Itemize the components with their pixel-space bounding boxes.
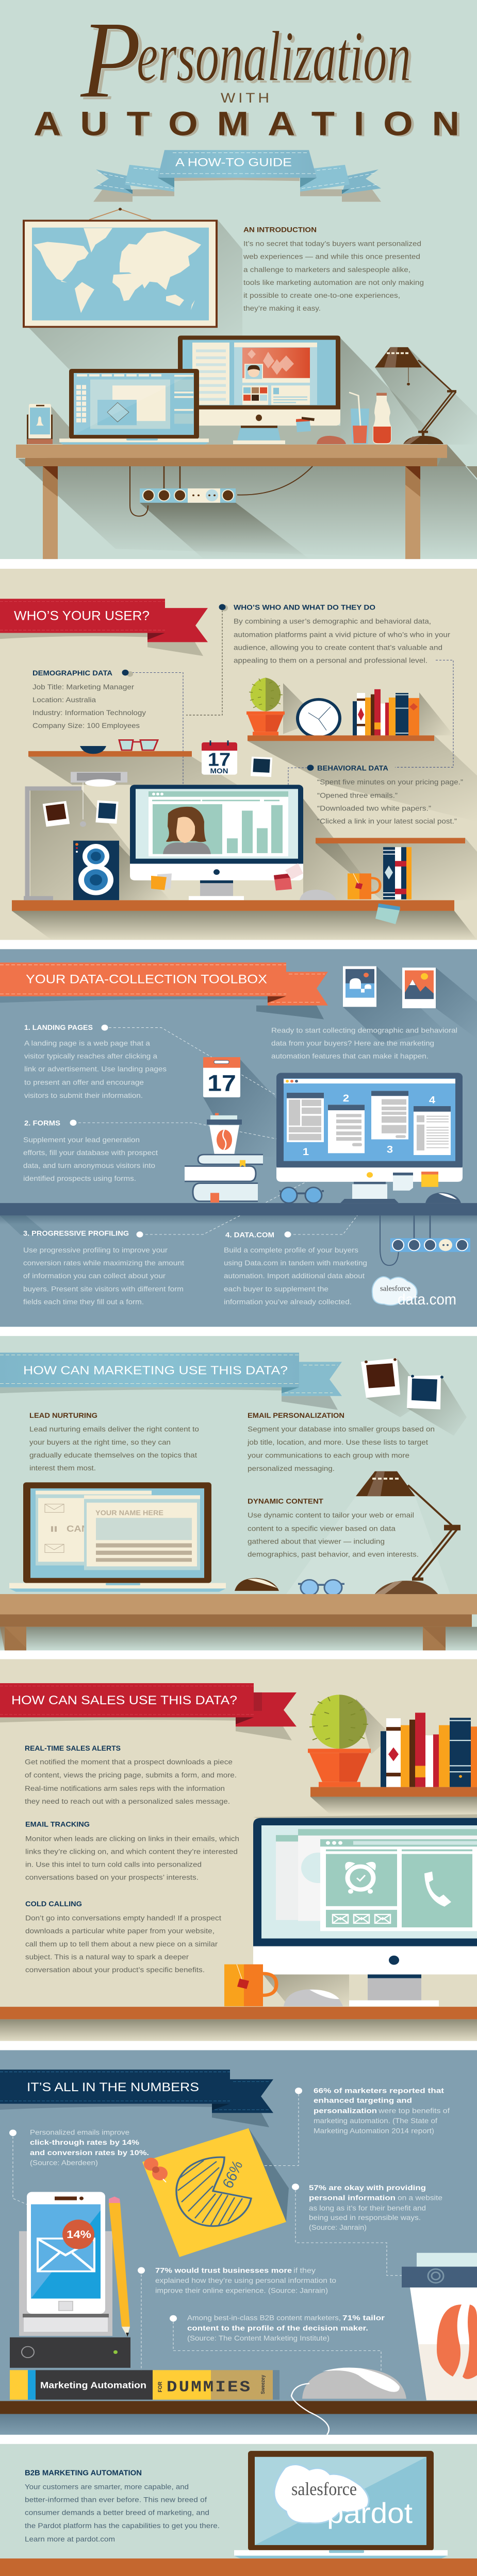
text: b2b marketing automation: better-informed than ever before. This new breed of xyxy=(25,2496,207,2504)
glass of juice xyxy=(349,393,369,444)
text: who's who: By combining a user’s demographic and behavioral data, xyxy=(234,618,431,625)
panel: sales use xyxy=(0,1659,477,2041)
laptop with email builder xyxy=(9,1482,226,1592)
intro text: a challenge to marketers and salespeople alike, xyxy=(243,266,410,274)
title: WITH xyxy=(221,90,269,106)
text: who's who: automation platforms paint a vivid picture of who’s who in your xyxy=(234,631,450,639)
text: real-time sales alerts: Real-time notifications arm sales reps with the information xyxy=(25,1785,225,1793)
laptop with pardot logo xyxy=(234,2451,448,2558)
text: who's who: WHO’S WHO AND WHAT DO THEY DO xyxy=(234,604,375,612)
stat: 66% of marketers: 66% of marketers reported that xyxy=(314,2087,444,2095)
dashed connectors xyxy=(128,611,453,813)
dashed connectors xyxy=(13,2094,427,2378)
ribbon: numbers xyxy=(0,2070,273,2113)
intro text: web experiences — and while this once presented xyxy=(243,253,420,261)
title: AUTOMATION xyxy=(36,105,462,143)
pie chart sketch xyxy=(176,2157,251,2226)
text: cold calling: call them up to tell them about a new piece on a similar xyxy=(25,1940,218,1948)
polaroid: night scene xyxy=(343,966,376,1007)
stat: 57% okay: as long as it’s for their benefit and xyxy=(309,2205,426,2212)
text: who's who xyxy=(219,604,450,665)
intro text: It’s no secret that today’s buyers want personalized xyxy=(243,240,421,248)
text: real-time sales alerts xyxy=(25,1745,237,1806)
callout: 14% xyxy=(62,2219,94,2249)
text: landing pages: to present an offer and encourage xyxy=(24,1079,144,1087)
text: landing pages: link or advertisement. Use landing pages xyxy=(24,1065,167,1074)
computer mouse with cable xyxy=(0,2367,477,2435)
icon: telephone xyxy=(424,1872,451,1907)
window numbers: 1 xyxy=(303,1146,309,1158)
shelf and desk long shadows xyxy=(12,683,477,940)
text: behavioral data: “Downloaded two white papers.” xyxy=(317,805,431,812)
text: real-time sales alerts: Get notified the moment that a prospect downloads a piece xyxy=(25,1758,233,1767)
text: email tracking: in. Use this intel to turn cold calls into personalized xyxy=(25,1861,202,1869)
wood shelves xyxy=(28,735,465,843)
phone on dock xyxy=(27,404,53,444)
text: data.com: using Data.com in tandem with marketing xyxy=(224,1260,367,1267)
text: landing pages xyxy=(24,1024,167,1100)
phone with email icon xyxy=(19,2192,112,2336)
text: demographic data: Company Size: 100 Employees xyxy=(32,722,140,730)
text: who's who: audience, allowing you to create content that’s valuable and xyxy=(234,644,442,652)
navy desk xyxy=(0,1203,477,1215)
intro text: tools like marketing automation are not only making xyxy=(243,279,424,287)
marketing automation for dummies book: Marketing Automation xyxy=(40,2380,146,2391)
bowl and red glasses xyxy=(80,740,158,754)
big monitor xyxy=(253,1818,477,2006)
icon: push pin xyxy=(144,2158,168,2182)
orange desk xyxy=(0,2007,477,2019)
text: forms xyxy=(23,1120,158,1183)
long shadows xyxy=(0,1699,477,2041)
intro text xyxy=(243,226,424,313)
orange mug xyxy=(224,1964,276,2006)
marketing automation for dummies book: DUMMIES xyxy=(167,2378,250,2396)
power strip and cables xyxy=(130,466,312,516)
orange desk xyxy=(12,900,454,911)
floor lamp xyxy=(24,772,127,900)
pencil xyxy=(109,2196,130,2337)
ribbon: sales xyxy=(0,1683,297,1726)
stat: 57% okay: 57% are okay with providing xyxy=(309,2184,426,2192)
coffee cup on books xyxy=(185,1113,263,1202)
lower books xyxy=(383,847,412,900)
text: dynamic content: gathered about that viewer — including xyxy=(248,1538,385,1546)
wooden desk xyxy=(16,445,447,559)
wall clock xyxy=(296,698,341,739)
window numbers: 4 xyxy=(429,1095,436,1106)
books xyxy=(381,1713,477,1787)
stat: 71% tailor: Among best-in-class B2B content marketers, xyxy=(187,2314,341,2322)
text: ready to start xyxy=(271,1027,457,1060)
stat: 57% okay: on a website xyxy=(398,2194,442,2202)
desk lamp xyxy=(375,347,456,444)
ribbon: who's your user xyxy=(0,599,208,656)
window numbers xyxy=(303,1093,436,1158)
panel: who's your user xyxy=(0,569,477,940)
text: b2b marketing automation: the Pardot platform has the capabilities to get you there. xyxy=(25,2522,220,2530)
stat: 77% trust: improve their online experience. (Source: Janrain) xyxy=(155,2287,328,2295)
text: email tracking xyxy=(25,1821,239,1882)
calendar: 17 mon: MON xyxy=(210,768,228,775)
panel: data-collection toolbox xyxy=(0,949,477,1327)
ribbon: a how-to guide: A HOW-TO GUIDE xyxy=(175,157,292,169)
bottle xyxy=(373,393,391,444)
laptop with pardot logo: salesforce xyxy=(291,2479,357,2500)
title: P xyxy=(83,1,144,124)
text: cold calling: Don’t go into conversations empty handed! If a prospect xyxy=(25,1914,221,1922)
panel: numbers xyxy=(0,2050,477,2435)
callout: 14%: 14% xyxy=(67,2228,91,2241)
calendar: 17 mon: 17 xyxy=(208,750,231,770)
framed world map xyxy=(23,208,218,328)
stat: 77% trust: if they xyxy=(293,2267,316,2275)
text: real-time sales alerts: of content, views the pricing page, submits a form, and more. xyxy=(25,1771,237,1780)
stat: click-through rates: Personalized emails improve xyxy=(30,2129,129,2137)
laptop with email builder: YOUR NAME HERE xyxy=(95,1510,163,1517)
note under desk xyxy=(375,904,400,924)
stat: click-through rates: and conversion rates by 10%. xyxy=(30,2149,149,2157)
ribbon: toolbox: YOUR DATA-COLLECTION TOOLBOX xyxy=(26,973,267,986)
form window 1 xyxy=(287,1093,324,1142)
coffee cup xyxy=(402,2253,477,2400)
panel: title and intro xyxy=(0,0,477,559)
pinned polaroids xyxy=(361,1358,443,1410)
notes and glasses xyxy=(279,1172,461,1203)
mouse xyxy=(235,1578,279,1591)
text: b2b marketing automation xyxy=(25,2469,220,2544)
long shadows xyxy=(0,1358,477,1650)
wall polaroids xyxy=(43,800,119,827)
form window 4 xyxy=(414,1106,451,1155)
text: progressive profiling xyxy=(23,1230,184,1306)
dark device xyxy=(10,2337,130,2368)
panel: marketing use xyxy=(0,1336,477,1650)
marketing automation for dummies book xyxy=(10,2370,279,2400)
text: email personalization: personalized messaging. xyxy=(248,1465,335,1473)
eyeglasses xyxy=(298,1580,344,1596)
books on shelf xyxy=(353,689,419,735)
text: ready to start: Ready to start collecting demographic and behavioral xyxy=(271,1027,457,1035)
stat: click-through rates: (Source: Aberdeen) xyxy=(30,2159,98,2167)
panel: pardot xyxy=(0,2444,477,2558)
text: data.com: each buyer to supplement the xyxy=(224,1285,328,1293)
window numbers: 2 xyxy=(343,1093,349,1104)
stat: click-through rates: click-through rates by 14% xyxy=(30,2139,139,2147)
monitor with user profile xyxy=(130,785,303,900)
laptop with email builder: CAN xyxy=(67,1524,89,1534)
text: ready to start: automation features that can make it happen. xyxy=(271,1053,429,1060)
sticky note with pie chart: 66% xyxy=(219,2159,246,2191)
laptop xyxy=(59,369,209,445)
text: lead nurturing: your buyers at the right time, so they can xyxy=(29,1438,171,1447)
cactus xyxy=(308,1694,371,1787)
long shadows xyxy=(0,966,477,1235)
speaker xyxy=(73,841,119,900)
marketing automation for dummies book: FOR xyxy=(158,2381,163,2392)
mouse xyxy=(284,1989,343,2006)
text: dynamic content xyxy=(248,1498,419,1558)
text: progressive profiling: 3. PROGRESSIVE PROFILING xyxy=(23,1230,129,1238)
title: P xyxy=(79,0,141,121)
text: email tracking: conversations based on your prospects’ interests. xyxy=(25,1874,199,1882)
text: lead nurturing: gradually educate themselves on the topics that xyxy=(29,1452,197,1460)
text: b2b marketing automation: B2B MARKETING AUTOMATION xyxy=(25,2469,142,2477)
text: data.com: Build a complete profile of your buyers xyxy=(224,1247,358,1255)
text: forms: 2. FORMS xyxy=(24,1120,60,1127)
text: cold calling: downloads a particular white paper from your website, xyxy=(25,1927,215,1935)
text: data.com: 4. DATA.COM xyxy=(225,1231,274,1239)
text: dynamic content: demographics, past behavior, and even interests. xyxy=(248,1551,419,1558)
polaroid: mountain xyxy=(402,968,436,1008)
text: landing pages: visitors to submit their information. xyxy=(24,1092,143,1100)
shelf xyxy=(310,1787,477,1797)
icon: envelope xyxy=(38,2239,94,2272)
text: demographic data: Industry: Information Technology xyxy=(32,709,146,717)
icons: envelopes xyxy=(333,1914,390,1923)
title: AUTOMATION xyxy=(34,104,459,143)
window numbers: 3 xyxy=(387,1144,393,1155)
stat: 66% of marketers: personalization xyxy=(314,2107,377,2115)
stat: 66% of marketers: Marketing Automation 2014 report) xyxy=(314,2127,434,2135)
text: dynamic content: Use dynamic content to tailor your web or email xyxy=(248,1512,414,1519)
text: forms: identified prospects using forms. xyxy=(23,1175,136,1183)
bottom orange desk xyxy=(0,2558,477,2576)
mouse xyxy=(300,890,336,900)
text: progressive profiling: fields each time they fill out a form. xyxy=(23,1298,144,1306)
text: behavioral data: “Spent five minutes on your pricing page.” xyxy=(317,778,463,786)
intro text: it possible to create one-to-one experiences, xyxy=(243,292,400,300)
sticky notes on monitor xyxy=(296,417,315,432)
text: progressive profiling: conversion rates while maximizing the amount xyxy=(23,1260,184,1267)
logo: salesforce data.com: salesforce xyxy=(380,1284,410,1293)
large desk lamp xyxy=(356,1471,460,1595)
sticky notes on monitor xyxy=(151,863,303,890)
text: landing pages: visitor typically reaches after clicking a xyxy=(24,1053,157,1060)
logo: salesforce data.com: data.com xyxy=(398,1291,456,1308)
text: progressive profiling: buyers. Present site visitors with different form xyxy=(23,1285,184,1293)
monitor with profile page xyxy=(178,335,340,444)
text: cold calling: subject. This is a natural way to spark a deeper xyxy=(25,1954,189,1961)
text: real-time sales alerts: REAL-TIME SALES ALERTS xyxy=(25,1745,121,1753)
text: behavioral data: BEHAVIORAL DATA xyxy=(317,765,388,772)
icon: alarm clock xyxy=(346,1863,375,1894)
ribbon: numbers: IT’S ALL IN THE NUMBERS xyxy=(27,2080,199,2094)
stat: 77% trust: explained how they’re using personal information to xyxy=(155,2277,336,2285)
text: email personalization: EMAIL PERSONALIZATION xyxy=(248,1412,344,1420)
ribbon: marketing xyxy=(0,1352,342,1396)
calendar: 17 mon xyxy=(202,740,237,775)
text: forms: data, and turn anonymous visitors into xyxy=(23,1162,155,1170)
text: b2b marketing automation: Your customers are smarter, more capable, and xyxy=(25,2483,189,2491)
intro text: they’re making it easy. xyxy=(243,305,321,313)
title xyxy=(34,0,462,143)
marketing automation for dummies book: Sweezey xyxy=(260,2375,266,2394)
text: lead nurturing: interest them most. xyxy=(29,1465,96,1472)
text: behavioral data xyxy=(307,765,463,825)
text: data.com: information you’ve already collected. xyxy=(224,1298,352,1306)
text: lead nurturing xyxy=(29,1412,199,1472)
text: behavioral data: “Clicked a link in your latest social post.” xyxy=(317,818,457,825)
text: data.com: automation. Import additional data about xyxy=(224,1273,365,1280)
text: cold calling: conversation about your product’s specific benefits. xyxy=(25,1967,205,1974)
power strip xyxy=(380,1215,470,1265)
intro text: AN INTRODUCTION xyxy=(243,226,317,234)
stat: 71% tailor: (Source: The Content Marketing Institute) xyxy=(187,2335,330,2343)
logo: salesforce data.com xyxy=(372,1277,456,1308)
text: lead nurturing: LEAD NURTURING xyxy=(29,1412,97,1420)
polaroid by calendar xyxy=(251,757,272,777)
stat: click-through rates xyxy=(9,2129,149,2167)
stat: 71% tailor: 71% tailor xyxy=(342,2314,385,2322)
stat: 57% okay: being used in responsible ways. xyxy=(309,2214,421,2222)
text: landing pages: A landing page is a web page that a xyxy=(24,1040,150,1047)
text: who's who: appealing to them on a personal and professional level. xyxy=(234,657,427,665)
text: email personalization: Segment your database into smaller groups based on xyxy=(248,1426,435,1433)
stat: 57% okay xyxy=(292,2183,442,2232)
stat: 77% trust: 77% would trust businesses more xyxy=(155,2267,292,2275)
text: b2b marketing automation: consumer demands a better breed of marketing, and xyxy=(25,2509,209,2517)
text: email personalization: job title, location, and more. Use these lists to target xyxy=(247,1438,428,1447)
text: progressive profiling: of information you can collect about your xyxy=(23,1273,166,1280)
text: forms: efforts, fill your database with prospect xyxy=(23,1149,158,1157)
stat: 77% trust xyxy=(138,2267,336,2295)
dashed connectors xyxy=(78,1028,415,1234)
text: email tracking: links they’re clicking on, and which content they’re interested xyxy=(25,1848,238,1856)
long shadows behind desk items xyxy=(18,220,477,559)
text: lead nurturing: Lead nurturing emails deliver the right content to xyxy=(29,1426,199,1433)
stat: 66% of marketers: enhanced targeting and xyxy=(314,2097,412,2105)
text: email tracking: Monitor when leads are clicking on links in their emails, which xyxy=(25,1835,239,1843)
text: behavioral data: “Opened three emails.” xyxy=(317,792,398,800)
text: cold calling xyxy=(25,1900,221,1974)
wide wooden desk xyxy=(0,1594,477,1650)
stat: 66% of marketers: were top benefits of xyxy=(378,2107,450,2115)
stat: 66% of marketers xyxy=(295,2087,450,2135)
ribbon: who's your user: WHO’S YOUR USER? xyxy=(14,608,150,623)
text: b2b marketing automation: Learn more at pardot.com xyxy=(25,2535,115,2544)
stat: 57% okay: personal information xyxy=(309,2194,396,2202)
long shadows xyxy=(0,2104,477,2435)
sticky note with pie chart xyxy=(142,2128,286,2257)
ribbon: sales: HOW CAN SALES USE THIS DATA? xyxy=(11,1693,237,1707)
stat: 71% tailor: content to the profile of the decision maker. xyxy=(187,2325,368,2332)
laptop with pardot logo: pardot xyxy=(327,2498,413,2529)
text: ready to start: data from your buyers? Here are the marketing xyxy=(271,1040,434,1047)
stat: 66% of marketers: marketing automation. (The State of xyxy=(314,2117,437,2125)
text: demographic data xyxy=(32,670,146,730)
text: dynamic content: DYNAMIC CONTENT xyxy=(248,1498,323,1505)
calendar: 17: 17 xyxy=(207,1071,236,1096)
ribbon: marketing: HOW CAN MARKETING USE THIS DATA? xyxy=(23,1364,288,1377)
text: demographic data: Job Title: Marketing Manager xyxy=(32,683,134,691)
text: progressive profiling: Use progressive profiling to improve your xyxy=(23,1247,168,1255)
text: data.com xyxy=(224,1231,367,1306)
text: email personalization xyxy=(247,1412,435,1473)
text: forms: Supplement your lead generation xyxy=(23,1137,140,1144)
ribbon: toolbox xyxy=(0,962,328,1006)
ribbon: a how-to guide xyxy=(93,150,381,202)
text: cold calling: COLD CALLING xyxy=(25,1900,82,1908)
woman avatar xyxy=(163,807,211,854)
text: demographic data: DEMOGRAPHIC DATA xyxy=(32,670,112,677)
cactus xyxy=(246,677,285,735)
desk mouse xyxy=(317,436,346,444)
text: email tracking: EMAIL TRACKING xyxy=(25,1821,90,1828)
form window 2 xyxy=(328,1105,365,1153)
text: landing pages: 1. LANDING PAGES xyxy=(24,1024,93,1032)
text: dynamic content: content to a specific viewer based on data xyxy=(248,1525,396,1533)
calendar: 17 xyxy=(203,1057,240,1097)
text: real-time sales alerts: they need to reach out with a personalized sales message. xyxy=(25,1798,230,1806)
text: email personalization: your communications to each group with more xyxy=(248,1452,409,1460)
orange mug xyxy=(348,873,380,900)
form window 3 xyxy=(371,1091,408,1139)
text: demographic data: Location: Australia xyxy=(32,697,96,704)
stat: 57% okay: (Source: Janrain) xyxy=(309,2224,367,2232)
monitor with four forms xyxy=(276,1073,463,1203)
stat: 71% tailor xyxy=(170,2314,385,2343)
